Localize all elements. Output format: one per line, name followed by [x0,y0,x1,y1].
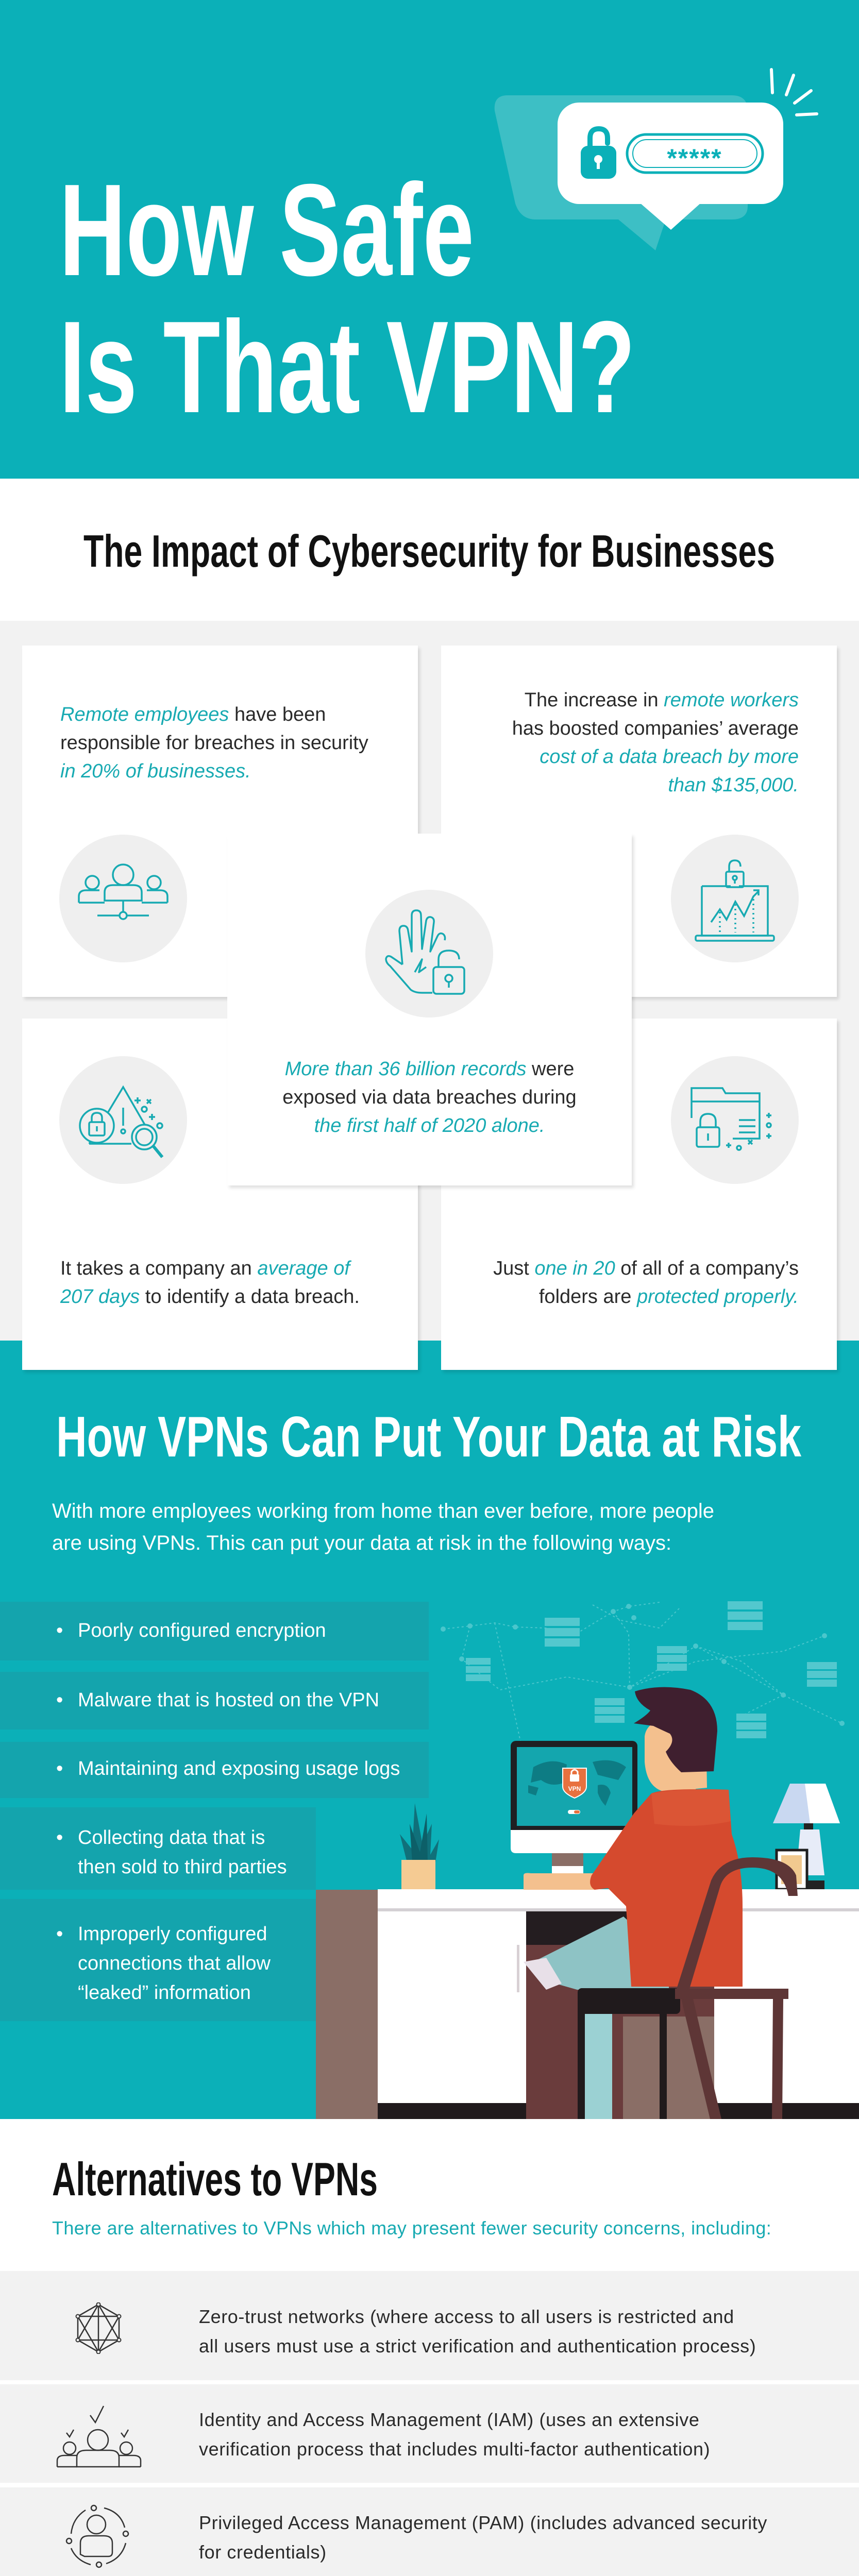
text block: VPN intro [52,1500,714,1554]
text block: exposed via data breaches during [282,1087,577,1108]
desk [316,1889,859,2119]
text block [493,1258,799,1308]
text block: Remote employees have been [60,704,326,725]
row: PAM [0,2487,859,2576]
risk 5 [0,1899,316,2021]
card: folders protected [441,1019,837,1370]
text block: alternatives intro: There are alternatives to VPNs which may present fewer security concerns, including: [52,2217,771,2239]
icon: warning lock search [59,1056,187,1184]
text block: in 20% of businesses. [60,760,251,782]
heading: alternatives to VPNs: Alternatives to VPNs [52,2154,378,2206]
plant [400,1803,439,1890]
risk 1 [0,1602,429,1660]
risk 3: Maintaining and exposing usage logs [78,1758,400,1780]
text block: cost of a data breach by more [540,746,799,768]
icon: people network [59,835,187,962]
text block: the first half of 2020 alone. [314,1115,545,1137]
row: IAM [0,2384,859,2483]
subtitle band [0,479,859,621]
card: remote employees [22,646,418,997]
text block: responsible for breaches in security [60,732,368,754]
text block: has boosted companies’ average [512,718,799,739]
text block: VPN intro: With more employees working from home than ever before, more people [52,1500,714,1522]
row: zero trust [0,2271,859,2380]
risk 3: • [56,1758,63,1780]
text: Zero-trust networks (where access to all users is restricted and [199,2306,734,2327]
icon: folder lock [671,1056,799,1184]
text block: 207 days to identify a data breach. [60,1286,360,1308]
text: Identity and Access Management (IAM) (uses an extensive [199,2409,699,2430]
text block: folders are protected properly. [539,1286,799,1308]
title: How Safe [59,157,474,303]
list: VPN risks [0,1602,429,2021]
risk 2 [0,1672,429,1730]
text [199,2512,767,2563]
card: cost of breach [441,646,837,997]
text block [60,704,368,782]
title: Is That VPN? [59,294,635,440]
text block: The increase in remote workers [525,689,799,711]
risk 5: connections that allow [78,1953,271,1974]
risk 4: Collecting data that is [78,1827,265,1849]
card: center records exposed [227,834,632,1185]
person [524,1687,743,2119]
risk 5: “leaked” information [78,1982,251,2004]
text: Privileged Access Management (PAM) (includes advanced security [199,2512,767,2533]
risk 2: • [56,1689,63,1711]
text block: VPN intro: are using VPNs. This can put your data at risk in the following ways: [52,1532,671,1554]
text block [60,1258,360,1308]
text block: More than 36 billion records were [285,1058,574,1080]
text block: It takes a company an average of [60,1258,350,1279]
icon: password speech bubble: ***** [667,144,722,173]
risk 5: • [56,1923,63,1945]
illustration: person at desk with VPN [316,1601,859,2119]
text block: than $135,000. [668,774,799,796]
chair [578,1857,798,2119]
text [199,2409,710,2460]
text: verification process that includes multi-factor authentication) [199,2438,710,2460]
text block: Just one in 20 of all of a company’s [493,1258,799,1279]
icon: hand lock [365,890,493,1018]
text: all users must use a strict verification and authentication process) [199,2335,756,2357]
text block [512,689,799,796]
lamp and frame [773,1784,840,1890]
monitor [511,1741,637,1875]
risk 2: Malware that is hosted on the VPN [78,1689,379,1711]
text: for credentials) [199,2541,327,2563]
header: teal hero [0,0,859,479]
icon: network hexagon [75,2302,122,2354]
risk 1: Poorly configured encryption [78,1620,326,1641]
title [59,157,635,440]
server network background [441,1601,845,1772]
risk 5: Improperly configured [78,1923,267,1945]
risk 4: • [56,1827,63,1849]
icon: people checks [57,2406,141,2468]
monitor: VPN [568,1785,581,1792]
icon: laptop lock chart [671,835,799,962]
icon: user cycle [66,2505,129,2568]
card: identify breach [22,1019,418,1370]
risk 4: then sold to third parties [78,1856,287,1878]
text [199,2306,756,2357]
panel: stats background [0,621,859,1342]
risk 4 [0,1807,316,1890]
icon: password speech bubble [495,70,817,250]
text block [282,1058,577,1137]
panel: teal VPN section background [0,1341,859,2119]
risk 1: • [56,1620,63,1641]
risk 3 [0,1742,429,1798]
